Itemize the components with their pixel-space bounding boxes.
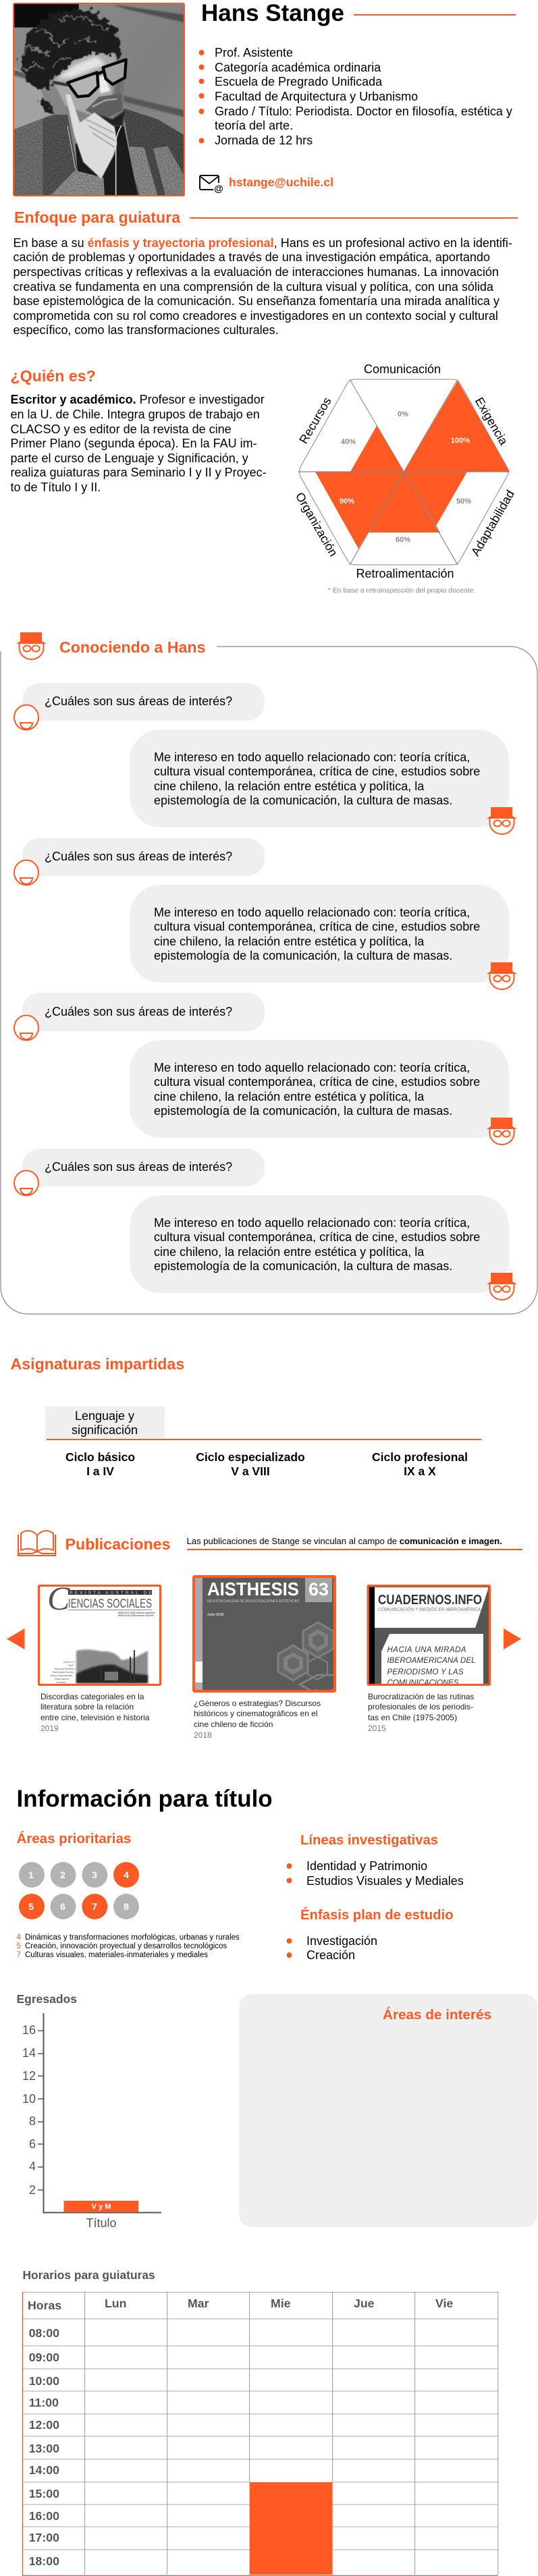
text block: quién es xyxy=(11,393,267,494)
bar chart: egresados: 8 xyxy=(29,2114,36,2128)
answer bubble 4 xyxy=(130,1195,509,1293)
caption: publication 1 xyxy=(41,1692,150,1733)
cycle: básico: I a IV xyxy=(86,1464,114,1478)
course box: Lenguaje y significación: significación xyxy=(72,1423,138,1437)
answer bubble 3: cine chileno, la relación entre estética y política, la xyxy=(154,1090,425,1103)
text block: enfoque: En base a su énfasis y trayectoria profesional, Hans es un profesional activo en la identifi- xyxy=(14,236,512,250)
photo glasses xyxy=(53,59,126,97)
title: Hans Stange xyxy=(201,0,344,26)
table hours: 15:00 xyxy=(29,2487,59,2500)
answer bubble 4: epistemología de la comunicación, la cultura de masas. xyxy=(154,1259,452,1273)
radar percentages: 40% xyxy=(341,438,356,446)
cover: Revista Austral de Ciencias Sociales: 2019 xyxy=(68,1664,74,1667)
table hours: 12:00 xyxy=(29,2418,59,2432)
table hours: 13:00 xyxy=(29,2442,59,2455)
bullet list: profile: Jornada de 12 hrs xyxy=(215,134,313,147)
cover: Revista Austral de Ciencias Sociales: Número 27 xyxy=(63,1661,75,1664)
cycle: básico xyxy=(65,1450,135,1478)
radar labels: Recursos xyxy=(296,395,334,446)
cycle: profesional: IX a X xyxy=(404,1464,436,1478)
answer bubble 4: Me intereso en todo aquello relacionado con: teoría crítica, xyxy=(154,1216,470,1230)
avatar: professor 4 xyxy=(487,1273,517,1300)
legend: priority areas: 5 xyxy=(16,1942,21,1950)
caption: publication 1: 2019 xyxy=(41,1724,59,1733)
text block: quién es: CLACSO y es editor de la revista de cine xyxy=(11,422,232,436)
heading: Asignaturas impartidas: Asignaturas impartidas xyxy=(11,1355,184,1373)
legend: priority areas: Culturas visuales, materiales-inmateriales y mediales xyxy=(25,1951,208,1959)
caption: publication 1: entre cine, televisión e historia xyxy=(41,1713,150,1722)
email: hstange@uchile.cl xyxy=(229,175,333,189)
cycle: profesional: Ciclo profesional xyxy=(372,1450,468,1464)
cycle: especializado xyxy=(196,1450,305,1478)
priority area circles xyxy=(19,1862,139,1919)
caption: publication 2: históricos y cinematográficos en el xyxy=(194,1709,317,1718)
bullet list: profile xyxy=(198,46,512,147)
text: publicaciones intro: Las publicaciones de Stange se vinculan al campo de comunicación e imagen. xyxy=(186,1536,502,1546)
radar percentages: 60% xyxy=(396,536,410,544)
avatar: professor 2 xyxy=(487,962,517,989)
cycle: especializado: V a VIII xyxy=(231,1464,270,1478)
table header: Vie xyxy=(435,2297,453,2310)
question bubble 2 xyxy=(22,838,265,876)
text block: enfoque: comprometida con su rol como creadores e investigadores en un contexto social y cultural xyxy=(14,309,498,323)
table hours: 08:00 xyxy=(29,2326,59,2340)
question bubble 2: ¿Cuáles son sus áreas de interés? xyxy=(45,850,232,863)
caption: publication 2: ¿Géneros o estrategias? Discursos xyxy=(194,1699,321,1708)
answer bubble 2: cine chileno, la relación entre estética y política, la xyxy=(154,935,425,948)
cover: Cuadernos.info: PERIODISMO Y LAS xyxy=(387,1668,464,1676)
question bubble 4: ¿Cuáles son sus áreas de interés? xyxy=(45,1160,232,1174)
answer bubble 3: Me intereso en todo aquello relacionado con: teoría crítica, xyxy=(154,1061,470,1074)
answer bubble 1: cultura visual contemporánea, crítica de cine, estudios sobre xyxy=(154,765,480,778)
heading: Énfasis plan de estudio: Énfasis plan de estudio xyxy=(300,1907,454,1923)
radar percentages: 100% xyxy=(451,437,470,445)
cycle: básico: Ciclo básico xyxy=(65,1450,135,1464)
bullet list: profile: Prof. Asistente xyxy=(215,46,293,59)
table header: Mie xyxy=(271,2297,291,2310)
cover: Revista Austral de Ciencias Sociales xyxy=(39,1579,161,1684)
cover: Revista Austral de Ciencias Sociales: IENCIAS SOCIALES xyxy=(68,1597,152,1610)
text block: enfoque: creativa se fundamenta en una comprensión de la cultura visual y política, con una sólida xyxy=(14,280,494,294)
cover: Revista Austral de Ciencias Sociales: REVISTA AUSTRAL DE xyxy=(70,1591,154,1595)
bar chart: egresados xyxy=(16,1992,161,2230)
cover: Revista Austral de Ciencias Sociales: ISSN 0717-3202 Versión Impresa xyxy=(118,1612,155,1614)
cover: Revista Austral de Ciencias Sociales: Sumario xyxy=(57,1681,65,1684)
text block: quién es: realiza guiaturas para Seminario I y II y Proyec- xyxy=(11,466,267,479)
legend: priority areas: 7 xyxy=(16,1951,21,1959)
heading: Horarios para guiaturas: Horarios para guiaturas xyxy=(23,2268,155,2282)
caption: publication 1: literatura sobre la relación xyxy=(41,1702,134,1711)
priority area circles: 2 xyxy=(60,1869,65,1880)
cover: Cuadernos.info: COMUNICACIÓN Y MEDIOS EN IBEROAMÉRICA xyxy=(378,1606,481,1612)
text block: quién es: parte el curso de Lenguaje y Significación, y xyxy=(11,451,248,465)
heading: Enfoque para guiatura: Enfoque para guiatura xyxy=(14,209,181,226)
caption: publication 2: 2018 xyxy=(194,1730,212,1740)
cycle: especializado: Ciclo especializado xyxy=(196,1450,305,1464)
table hours: 14:00 xyxy=(29,2463,59,2477)
table header: Horas xyxy=(28,2299,61,2312)
priority area circles: 3 xyxy=(92,1869,97,1880)
list: énfasis xyxy=(286,1934,377,1962)
table header: Mar xyxy=(188,2297,209,2310)
text block: enfoque xyxy=(14,236,512,337)
cover: Revista Austral de Ciencias Sociales: Marco Vidal Barrales xyxy=(51,1674,73,1677)
cover: Revista Austral de Ciencias Sociales: Raúl Ibarra Fuentes xyxy=(53,1671,74,1674)
heading rule xyxy=(190,217,518,219)
text block: quién es: en la U. de Chile. Integra grupos de trabajo en xyxy=(11,408,260,421)
answer bubble 1 xyxy=(130,730,509,827)
bullet list: profile: Escuela de Pregrado Unificada xyxy=(215,75,383,88)
caption: publication 3: tas en Chile (1975-2005) xyxy=(368,1713,457,1722)
priority area circles: 8 xyxy=(124,1901,129,1912)
table hours: 10:00 xyxy=(29,2374,59,2388)
bullet list: profile: Grado / Título: Periodista. Doctor en filosofía, estética y xyxy=(215,105,512,118)
answer bubble 3: cultura visual contemporánea, crítica de cine, estudios sobre xyxy=(154,1075,480,1089)
heading: Quién es: ¿Quién es? xyxy=(11,367,96,385)
cover: Cuadernos.info: HACIA UNA MIRADA xyxy=(387,1646,466,1654)
answer bubble 4: cultura visual contemporánea, crítica de cine, estudios sobre xyxy=(154,1230,480,1244)
text block: quién es: Escritor y académico. Profesor e investigador xyxy=(11,393,265,406)
arrow: previous xyxy=(7,1628,24,1649)
heading: Áreas prioritarias: Áreas prioritarias xyxy=(16,1831,131,1846)
table header: Lun xyxy=(105,2297,126,2310)
table hours: 17:00 xyxy=(29,2531,59,2544)
avatar: professor 3 xyxy=(487,1118,517,1145)
legend: priority areas: Dinámicas y transformaciones morfológicas, urbanas y rurales xyxy=(25,1934,240,1942)
icon: header avatar xyxy=(16,632,47,659)
avatar: student 4 xyxy=(14,1170,38,1196)
cover: Revista Austral de Ciencias Sociales: C xyxy=(47,1579,70,1617)
table hours xyxy=(29,2326,59,2568)
caption: publication 3: Burocratización de las rutinas xyxy=(368,1692,474,1701)
answer bubble 3: epistemología de la comunicación, la cultura de masas. xyxy=(154,1104,452,1118)
answer bubble 3 xyxy=(130,1040,509,1138)
priority area circles: 4 xyxy=(124,1869,129,1880)
question bubble 1 xyxy=(22,683,265,721)
icon: email: @ xyxy=(214,183,223,194)
priority area circles: 6 xyxy=(60,1901,65,1912)
table hours: 11:00 xyxy=(29,2396,59,2409)
heading: Líneas investigativas: Líneas investigativas xyxy=(300,1833,438,1848)
cover: Cuadernos.info: CUADERNOS.INFO xyxy=(378,1593,482,1608)
avatar: student 1 xyxy=(14,705,38,730)
bar chart: egresados: Egresados xyxy=(16,1992,77,2006)
caption: publication 2 xyxy=(194,1699,321,1740)
cover: Revista Austral de Ciencias Sociales: Francisca Ramírez y xyxy=(54,1668,76,1670)
photo hand xyxy=(65,94,117,179)
photo face xyxy=(53,51,124,118)
caption: publication 1: Discordias categoriales en la xyxy=(41,1692,144,1701)
legend: priority areas xyxy=(16,1934,240,1959)
radar percentages: 50% xyxy=(456,497,471,505)
title rule xyxy=(354,14,516,16)
text block: enfoque: base epistemológica de la comunicación. Su enseñanza fomentaría una mirada analítica y xyxy=(14,294,500,308)
avatar: student 2 xyxy=(14,860,38,885)
text block: quién es: Primer Plano (segunda época). En la FAU im- xyxy=(11,437,257,450)
radar labels: Organización xyxy=(293,490,340,559)
list: énfasis: Investigación xyxy=(306,1934,377,1948)
radar labels xyxy=(293,362,517,580)
publicaciones rule xyxy=(187,1549,522,1550)
caption: publication 3: profesionales de los periodis- xyxy=(368,1702,473,1711)
cover: Cuadernos.info xyxy=(368,1586,490,1687)
cover: Aisthesis 63: REVISTA CHILENA DE INVESTIGACIONES ESTÉTICAS xyxy=(207,1599,299,1604)
answer bubble 1: cine chileno, la relación entre estética y política, la xyxy=(154,779,425,793)
priority area circles: 7 xyxy=(92,1901,97,1912)
bar chart: egresados: 4 xyxy=(29,2160,36,2173)
schedule table xyxy=(22,2292,498,2575)
heading: Publicaciones: Publicaciones xyxy=(65,1535,170,1553)
bar chart: egresados: V y M xyxy=(92,2203,111,2211)
table hours: 16:00 xyxy=(29,2509,59,2523)
footnote: * En base a retroinspección del propio docente. xyxy=(328,587,475,595)
icon: email xyxy=(200,175,224,194)
timeline rule xyxy=(47,1439,481,1440)
answer bubble 2: cultura visual contemporánea, crítica de cine, estudios sobre xyxy=(154,920,480,933)
cover: Aisthesis 63: 63 xyxy=(308,1579,329,1599)
text block: quién es: to de Título I y II. xyxy=(11,481,101,494)
cover: Aisthesis 63 xyxy=(194,1577,344,1694)
photo sweater and shirt xyxy=(14,108,184,195)
photo hair xyxy=(20,9,120,89)
cover: Cuadernos.info: COMUNICACIONES xyxy=(387,1679,459,1687)
question bubble 3 xyxy=(22,993,265,1031)
cycle: profesional xyxy=(372,1450,468,1478)
panel: áreas de interés xyxy=(239,1994,537,2227)
answer bubble 1: epistemología de la comunicación, la cultura de masas. xyxy=(154,794,452,807)
priority area circles: 5 xyxy=(28,1901,34,1912)
avatar: student 3 xyxy=(14,1015,38,1041)
radar percentages: 0% xyxy=(398,410,408,418)
caption: publication 2: cine chileno de ficción xyxy=(194,1720,273,1729)
radar labels: Exigencia xyxy=(473,395,511,448)
question bubble 1: ¿Cuáles son sus áreas de interés? xyxy=(45,694,232,708)
cover: Aisthesis 63: AISTHESIS xyxy=(207,1579,299,1599)
radar labels: Adaptabilidad xyxy=(468,488,517,558)
legend: priority areas: Creación, innovación proyectual y desarrollos tecnológicos xyxy=(25,1942,227,1950)
list: líneas: Identidad y Patrimonio xyxy=(306,1859,427,1873)
table hours: 18:00 xyxy=(29,2554,59,2568)
answer bubble 4: cine chileno, la relación entre estética y política, la xyxy=(154,1245,425,1259)
bar chart: egresados: 14 xyxy=(22,2046,36,2060)
bullet list: profile: Categoría académica ordinaria xyxy=(215,61,381,74)
bullet list: profile: teoría del arte. xyxy=(215,119,293,132)
cover: Cuadernos.info: IBEROAMERICANA DEL xyxy=(387,1657,475,1665)
answer bubble 2: Me intereso en todo aquello relacionado con: teoría crítica, xyxy=(154,906,470,919)
text block: enfoque: cación de problemas y oportunidades a través de una investigación empática, aportando xyxy=(14,250,490,264)
bar chart: egresados: 16 xyxy=(22,2023,36,2037)
heading: Información para título: Información para título xyxy=(16,1786,273,1812)
list: énfasis: Creación xyxy=(306,1948,355,1962)
heading: Conociendo a Hans: Conociendo a Hans xyxy=(59,638,205,656)
bullet list: profile: Facultad de Arquitectura y Urbanismo xyxy=(215,90,418,103)
panel: conociendo a Hans frame xyxy=(1,647,537,1314)
caption: publication 3: 2015 xyxy=(368,1724,386,1733)
radar labels: Comunicación xyxy=(364,362,441,376)
avatar: professor 1 xyxy=(487,807,517,834)
table header xyxy=(28,2297,453,2312)
bar chart: egresados: Título xyxy=(86,2216,117,2230)
course box: Lenguaje y significación: Lenguaje y xyxy=(75,1409,134,1423)
photo: portrait of Hans Stange xyxy=(13,3,185,196)
legend: priority areas: 4 xyxy=(16,1934,22,1942)
cover: Aisthesis 63: Julio 2018 xyxy=(207,1613,223,1617)
panel: áreas de interés: Áreas de interés xyxy=(383,2007,491,2023)
icon: open book xyxy=(18,1531,55,1556)
bar chart: egresados: 10 xyxy=(22,2092,36,2106)
radar percentages xyxy=(340,410,471,544)
radar labels: Retroalimentación xyxy=(356,567,454,580)
radar chart: competencias xyxy=(293,362,517,580)
answer bubble 2: epistemología de la comunicación, la cultura de masas. xyxy=(154,949,452,962)
bar chart: egresados: 12 xyxy=(22,2069,36,2083)
photo background xyxy=(14,4,184,195)
question bubble 3: ¿Cuáles son sus áreas de interés? xyxy=(45,1005,232,1018)
cover: Revista Austral de Ciencias Sociales: ISSN 0718-1795 Versión On-line xyxy=(118,1614,154,1617)
cover: Revista Austral de Ciencias Sociales: Otros autores xyxy=(55,1678,69,1680)
table hours: 09:00 xyxy=(29,2351,59,2364)
answer bubble 1: Me intereso en todo aquello relacionado con: teoría crítica, xyxy=(154,750,470,764)
course box: Lenguaje y significación xyxy=(45,1406,165,1439)
caption: publication 3 xyxy=(368,1692,474,1733)
priority area circles: 1 xyxy=(28,1869,34,1880)
list: líneas: Estudios Visuales y Mediales xyxy=(306,1874,464,1888)
table header: Jue xyxy=(354,2297,375,2310)
radar percentages: 90% xyxy=(340,497,354,505)
text block: enfoque: perspectivas críticas y reflexivas a la evaluación de interacciones humanas. La innovación xyxy=(14,265,499,279)
bar chart: egresados: 2 xyxy=(29,2183,36,2197)
answer bubble 2 xyxy=(130,885,509,983)
question bubble 4 xyxy=(22,1149,265,1186)
bar chart: egresados: 6 xyxy=(29,2137,36,2151)
arrow: next xyxy=(504,1628,521,1649)
list: líneas xyxy=(286,1859,464,1888)
text block: enfoque: específico, como las transformaciones culturales. xyxy=(14,323,279,337)
